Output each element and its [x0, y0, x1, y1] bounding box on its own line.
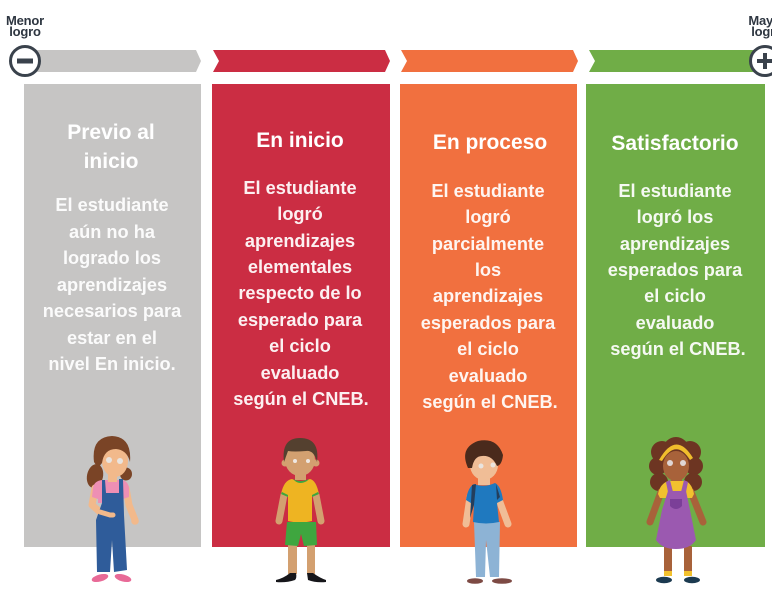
- arrow: orange level: [401, 50, 578, 72]
- heading: Previo al inicio: Previo al: [67, 121, 155, 144]
- text block: En proceso description: [421, 181, 558, 412]
- panel: Satisfactorio: [586, 84, 765, 547]
- text block: Previo al inicio description: logrado los: [63, 248, 161, 268]
- text block: En proceso description: evaluado: [449, 366, 527, 386]
- text block: Previo al inicio description: aprendizajes: [57, 275, 167, 295]
- text block: Previo al inicio description: necesarios para: [43, 301, 182, 321]
- arrow: red level: [213, 50, 390, 72]
- text block: En inicio description: El estudiante: [243, 178, 357, 198]
- text block: En inicio description: según el CNEB.: [233, 389, 369, 409]
- hair curls: [649, 437, 703, 491]
- icon: plus circle: [750, 46, 772, 76]
- illustration: girl in purple dress: [649, 437, 703, 583]
- text block: Previo al inicio description: aún no ha: [69, 222, 156, 242]
- text block: En proceso description: parcialmente: [432, 234, 544, 254]
- heading: Previo al inicio: [67, 121, 155, 173]
- text block: Previo al inicio description: [43, 195, 182, 374]
- text block: En proceso description: aprendizajes: [433, 286, 543, 306]
- heading: Previo al inicio: inicio: [84, 150, 138, 173]
- heading: En inicio: En inicio: [256, 129, 344, 152]
- text block: En proceso description: según el CNEB.: [422, 392, 558, 412]
- text block: En proceso description: el ciclo: [457, 339, 519, 359]
- text block: En inicio description: respecto de lo: [238, 283, 362, 303]
- text block: En inicio description: [233, 178, 369, 409]
- text block: En proceso description: los: [475, 260, 501, 280]
- arrow: green level: [589, 50, 765, 72]
- text block: Previo al inicio description: estar en el: [67, 328, 157, 348]
- illustration: boy with backpack: [465, 440, 512, 584]
- text block: En inicio description: elementales: [248, 257, 352, 277]
- text block: Satisfactorio description: evaluado: [636, 313, 714, 333]
- scale label: Mayor logro: [748, 13, 772, 39]
- text block: Satisfactorio description: según el CNEB.: [610, 339, 746, 359]
- text block: Satisfactorio description: el ciclo: [644, 286, 706, 306]
- text block: En proceso description: logró: [465, 207, 511, 227]
- text block: En proceso description: esperados para: [421, 313, 556, 333]
- text block: Satisfactorio description: logró los: [637, 207, 713, 227]
- icon: minus circle: [10, 46, 40, 76]
- scale label: Menor logro: [6, 13, 44, 39]
- text block: Previo al inicio description: nivel En inicio.: [48, 354, 176, 374]
- illustration: girl in overalls: [85, 436, 139, 584]
- text block: Previo al inicio description: El estudiante: [55, 195, 169, 215]
- panel: En proceso: [400, 84, 577, 547]
- heading: En proceso: En proceso: [433, 131, 547, 154]
- text block: En inicio description: evaluado: [261, 363, 339, 383]
- scale label: Menor logro: logro: [9, 24, 41, 39]
- text block: Satisfactorio description: aprendizajes: [620, 234, 730, 254]
- text block: En inicio description: aprendizajes: [245, 231, 355, 251]
- text block: Satisfactorio description: esperados para: [608, 260, 743, 280]
- text block: Satisfactorio description: [608, 181, 746, 359]
- illustration: boy in yellow shirt: [276, 438, 326, 582]
- scale label: Menor logro: Menor: [6, 13, 44, 28]
- text block: Satisfactorio description: El estudiante: [618, 181, 732, 201]
- heading: Satisfactorio: Satisfactorio: [611, 132, 739, 155]
- text block: En inicio description: esperado para: [238, 310, 363, 330]
- arrow: gray level: [35, 50, 201, 72]
- panel: Previo al inicio: [24, 84, 201, 547]
- panel: En inicio: [212, 84, 390, 547]
- text block: En inicio description: el ciclo: [269, 336, 331, 356]
- text block: En proceso description: El estudiante: [431, 181, 545, 201]
- text block: En inicio description: logró: [277, 204, 323, 224]
